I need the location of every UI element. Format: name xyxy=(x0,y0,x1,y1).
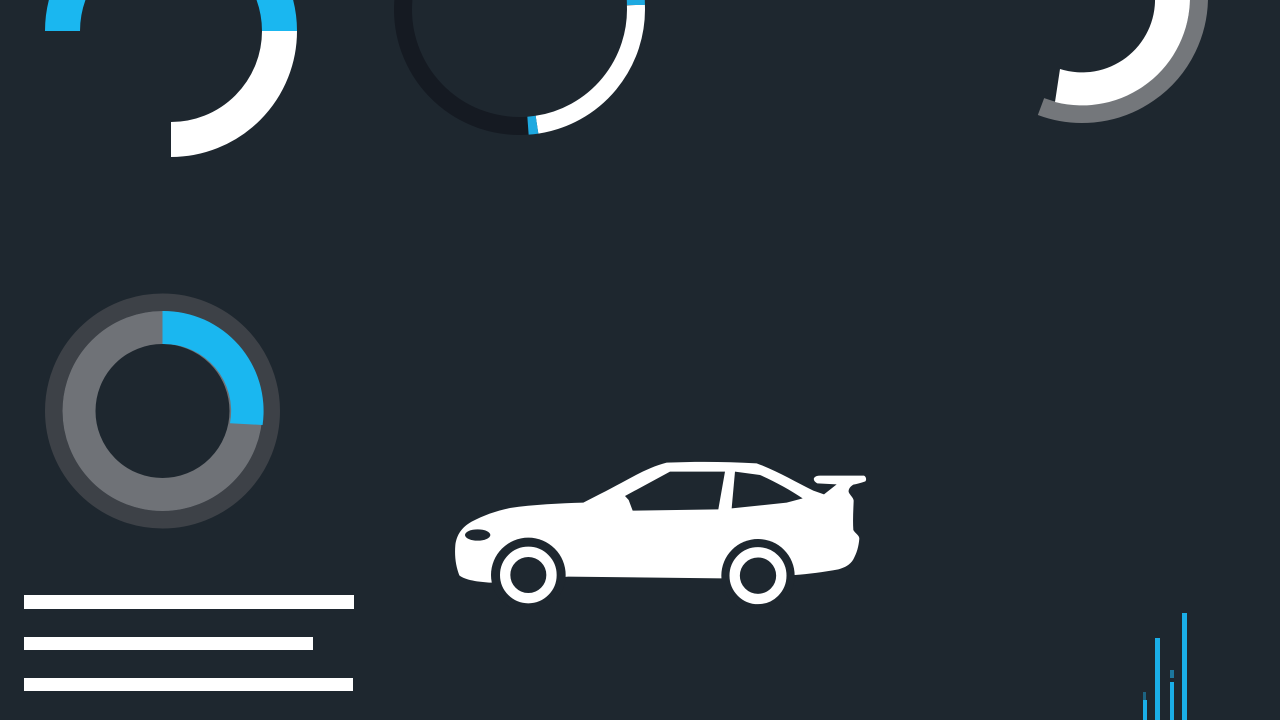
icon: white sports car xyxy=(455,462,866,612)
car body xyxy=(455,462,866,583)
ring chart: top right white with grey outer arc xyxy=(1041,0,1199,114)
rear window xyxy=(732,472,803,508)
ring chart: top centre thin white, blue and dark xyxy=(403,0,636,126)
front window xyxy=(625,472,725,511)
front wheel arch xyxy=(491,538,566,612)
text placeholder lines xyxy=(24,595,354,691)
headlight xyxy=(465,529,490,541)
ring chart: top left white and blue xyxy=(62,0,280,140)
rear wheel arch xyxy=(721,539,795,612)
donut chart: left with blue segment xyxy=(54,302,271,520)
front wheel xyxy=(505,552,551,598)
rear wheel xyxy=(735,552,781,599)
bar chart: thin blue bars bottom right xyxy=(1143,613,1187,720)
